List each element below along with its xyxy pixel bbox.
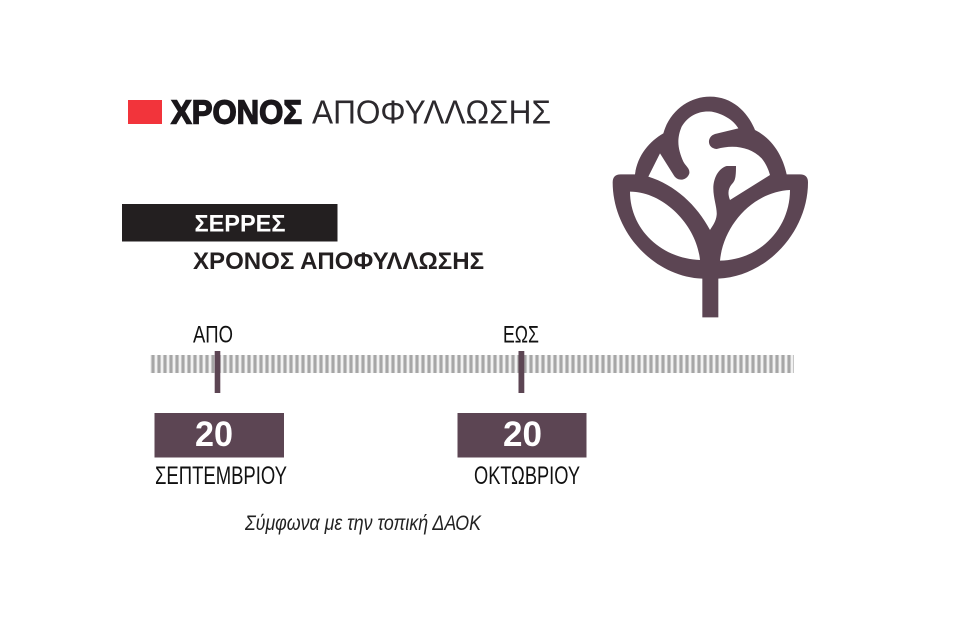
start marker <box>154 322 287 490</box>
region banner: Serres: ΣΕΡΡΕΣ <box>194 211 286 238</box>
heading <box>128 93 551 130</box>
subtitle: ΧΡΟΝΟΣ ΑΠΟΦΥΛΛΩΣΗΣ <box>193 248 484 275</box>
heading light words: ΑΠΟΦΥΛΛΩΣΗΣ <box>312 93 551 130</box>
month: ΣΕΠΤΕΜΒΡΙΟΥ <box>155 462 287 490</box>
end marker <box>458 322 586 490</box>
region banner: Serres <box>122 204 338 242</box>
source note: Σύμφωνα με την τοπική ΔΑΟΚ <box>244 512 482 535</box>
tick marker <box>215 351 220 393</box>
label: until: ΕΩΣ <box>503 322 539 348</box>
month: ΟΚΤΩΒΡΙΟΥ <box>474 462 580 490</box>
icon: cotton plant <box>613 97 808 317</box>
day number: 20 <box>195 415 233 454</box>
label: from: ΑΠΟ <box>193 322 233 348</box>
tick marker <box>518 351 524 393</box>
date box <box>458 413 586 458</box>
timeline ruler <box>150 355 794 373</box>
heading bold word: ΧΡΟΝΟΣ <box>171 93 302 130</box>
heading marker: red square <box>128 100 162 124</box>
day number: 20 <box>503 415 542 454</box>
date box <box>154 413 284 458</box>
